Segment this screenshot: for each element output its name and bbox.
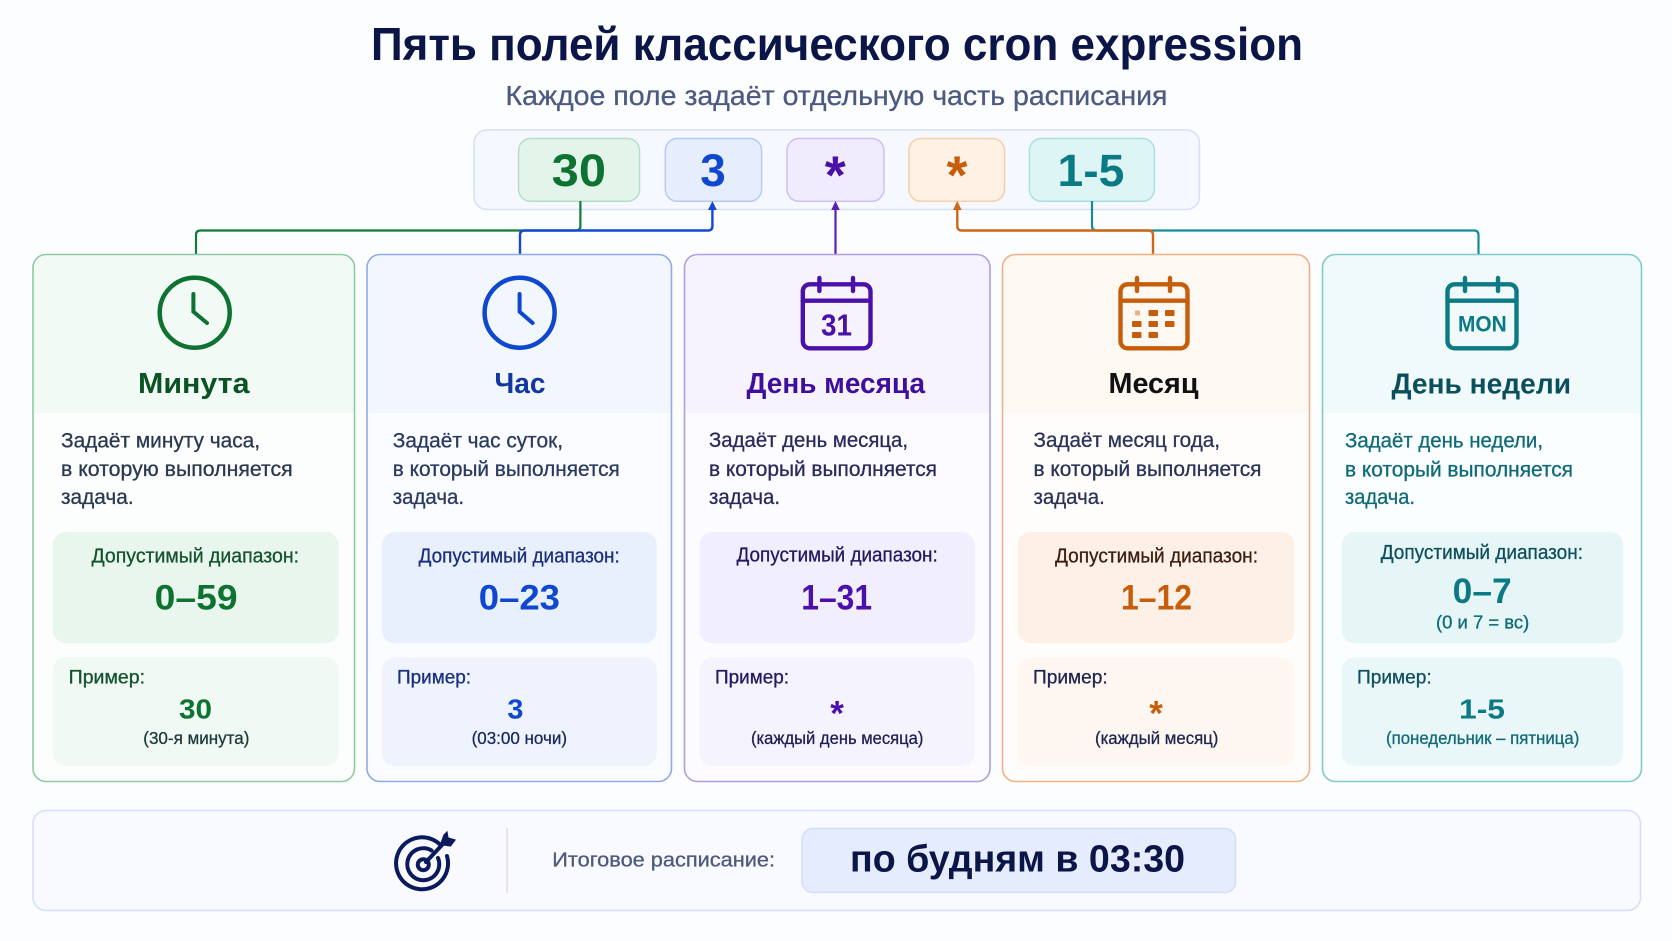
panel: resulting schedule: [33, 810, 1640, 910]
description: Задаёт день месяца,: [709, 429, 908, 452]
heading: Час: [494, 368, 546, 400]
subtitle: Каждое поле задаёт отдельную часть расписания: [506, 80, 1168, 111]
title: Пять полей классического cron expression: [371, 18, 1303, 70]
description: в который выполняется: [393, 458, 620, 481]
description: задача.: [61, 486, 134, 509]
description: [1034, 429, 1262, 509]
panel: hour card: [367, 254, 672, 782]
chip: hour 3: [665, 138, 762, 201]
panel: weekday card: [1322, 254, 1642, 782]
example box: Пример:: [1033, 667, 1108, 688]
divider: [506, 828, 508, 893]
connector: hour card to 3: [520, 201, 717, 254]
range box: Допустимый диапазон:: [92, 546, 299, 568]
icon: calendar 31: 31: [821, 308, 852, 342]
panel: minute card: [33, 254, 354, 782]
example box: *: [830, 694, 844, 734]
connector: weekday card to 1-5: [1092, 201, 1478, 254]
panel: month card: [1002, 254, 1310, 782]
description: задача.: [1345, 486, 1415, 509]
chip: weekday 1-5: 1-5: [1058, 145, 1124, 196]
description: [709, 429, 937, 509]
example box: Пример:: [715, 667, 789, 688]
chip: month asterisk: *: [946, 146, 968, 206]
icon: calendar MON: MON: [1458, 312, 1507, 337]
heading: День месяца: [746, 368, 926, 400]
icon: calendar 31: [803, 278, 870, 348]
example box: Пример:: [69, 667, 145, 688]
range box: 0–7: [1453, 572, 1512, 611]
example box: [1018, 657, 1295, 766]
icon: calendar MON: [1448, 278, 1516, 348]
range box: 1–12: [1121, 578, 1192, 617]
example box: *: [1149, 694, 1163, 734]
icon: target with arrow: [396, 832, 455, 889]
range box: Допустимый диапазон:: [1055, 546, 1258, 568]
icon: clock: [160, 278, 230, 348]
icon: calendar grid: [1120, 278, 1188, 348]
example box: 3: [507, 693, 523, 724]
result chip: [802, 828, 1236, 892]
range box: 1–31: [801, 578, 872, 617]
range box: (0 и 7 = вс): [1436, 612, 1529, 632]
description: в который выполняется: [709, 458, 937, 481]
example box: [53, 657, 339, 766]
description: в который выполняется: [1034, 458, 1262, 481]
description: задача.: [1034, 486, 1105, 509]
result chip: по будням в 03:30: [850, 839, 1185, 881]
description: [393, 430, 620, 509]
range box: 0–59: [155, 578, 238, 617]
range box: [53, 532, 339, 643]
description: в который выполняется: [1345, 458, 1573, 482]
chip: month asterisk: [909, 138, 1004, 206]
description: Задаёт месяц года,: [1034, 429, 1220, 452]
example box: (03:00 ночи): [472, 728, 567, 748]
description: [1345, 430, 1573, 509]
description: Задаёт минуту часа,: [61, 430, 260, 452]
range box: Допустимый диапазон:: [1381, 542, 1583, 564]
example box: [700, 657, 975, 766]
range box: [1342, 532, 1623, 643]
range box: [1018, 532, 1295, 643]
heading: Минута: [138, 368, 250, 400]
example box: Пример:: [397, 667, 471, 688]
panel: cron expression strip: [474, 130, 1200, 210]
range box: [700, 532, 975, 643]
example box: (30-я минута): [143, 728, 249, 748]
example box: 30: [179, 693, 212, 724]
chip: day of month asterisk: [787, 138, 884, 206]
example box: (каждый месяц): [1095, 728, 1218, 748]
description: Задаёт день недели,: [1345, 430, 1543, 452]
label: Итоговое расписание:: [552, 848, 775, 872]
example box: (понедельник – пятница): [1386, 728, 1579, 748]
chip: minute 30: 30: [552, 145, 606, 196]
connector: minute card to 30: [196, 201, 580, 254]
chip: minute 30: [519, 138, 640, 201]
description: задача.: [709, 486, 780, 509]
range box: Допустимый диапазон:: [736, 545, 938, 567]
heading: Месяц: [1108, 368, 1199, 400]
chip: weekday 1-5: [1029, 138, 1154, 201]
description: [61, 430, 293, 509]
range box: [382, 532, 657, 643]
example box: 1-5: [1459, 693, 1505, 724]
range box: Допустимый диапазон:: [419, 546, 620, 568]
range box: 0–23: [479, 578, 560, 617]
panel: day of month card: [684, 254, 990, 782]
description: задача.: [393, 486, 464, 509]
description: в которую выполняется: [61, 458, 293, 481]
icon: clock: [485, 278, 555, 348]
connector: month card to asterisk: [953, 201, 1153, 254]
heading: День недели: [1392, 368, 1571, 400]
example box: (каждый день месяца): [751, 728, 923, 748]
description: Задаёт час суток,: [393, 430, 563, 452]
example box: [1342, 657, 1623, 766]
chip: day of month asterisk: *: [825, 146, 846, 206]
connector: day of month card to asterisk: [831, 201, 840, 254]
example box: Пример:: [1357, 667, 1432, 688]
chip: hour 3: 3: [700, 145, 726, 196]
example box: [382, 657, 657, 766]
